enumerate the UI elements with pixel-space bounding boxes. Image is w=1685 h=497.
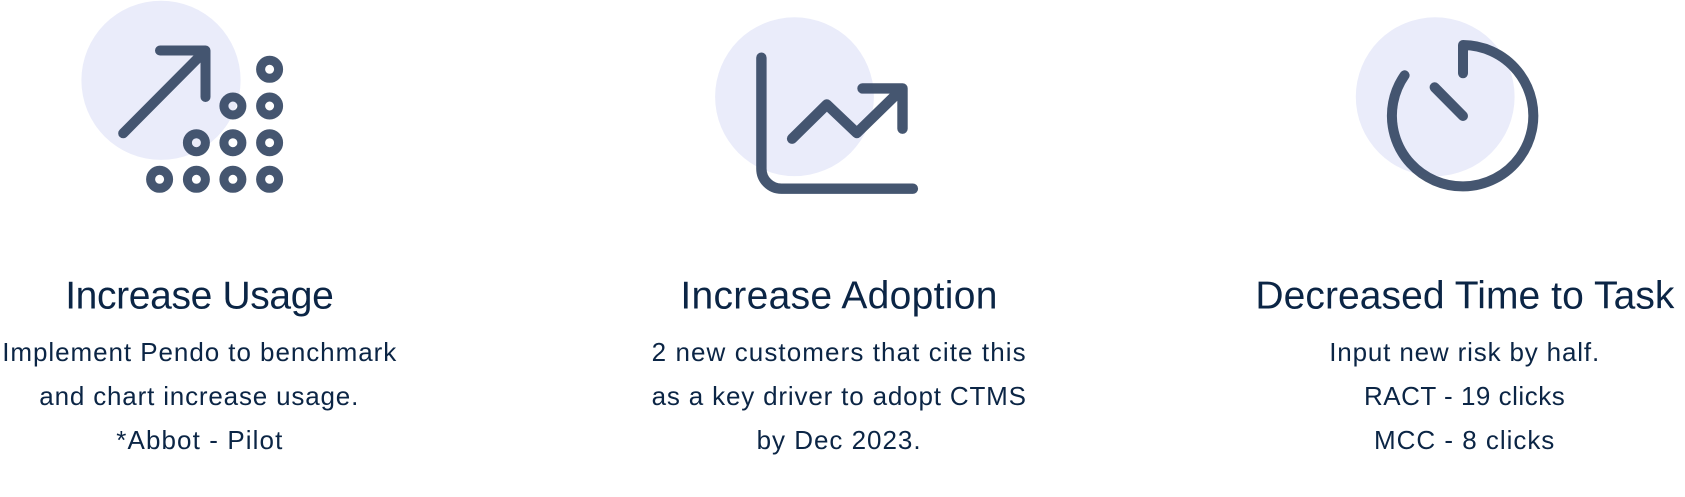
icon: timer [1356, 17, 1533, 186]
text block: increase usage description: Implement Pendo to benchmark [2, 337, 397, 367]
text block: decreased time description: RACT - 19 clicks [1364, 381, 1565, 411]
heading: increase adoption: Increase Adoption [680, 274, 997, 318]
text block: decreased time description: Input new risk by half. [1329, 337, 1599, 367]
text block: increase adoption description: by Dec 2023. [757, 425, 921, 455]
text block: increase adoption description: as a key driver to adopt CTMS [652, 381, 1026, 411]
panel: decreased time to task [1255, 17, 1675, 455]
text block: increase usage description: and chart increase usage. [39, 381, 358, 411]
text block: increase usage description [2, 337, 397, 455]
heading: increase usage: Increase Usage [65, 274, 334, 318]
text block: increase usage description: *Abbot - Pilot [116, 425, 283, 455]
text block: increase adoption description: 2 new customers that cite this [652, 337, 1026, 367]
text block: decreased time description [1329, 337, 1599, 455]
icon: arrow with rising dots [81, 1, 279, 188]
text block: decreased time description: MCC - 8 clicks [1374, 425, 1554, 455]
heading: decreased time to task: Decreased Time to Task [1255, 274, 1675, 318]
panel: increase usage [2, 1, 397, 455]
text block: increase adoption description [652, 337, 1026, 455]
icon: line chart with rising arrow [715, 17, 913, 189]
panel: increase adoption [652, 17, 1026, 455]
